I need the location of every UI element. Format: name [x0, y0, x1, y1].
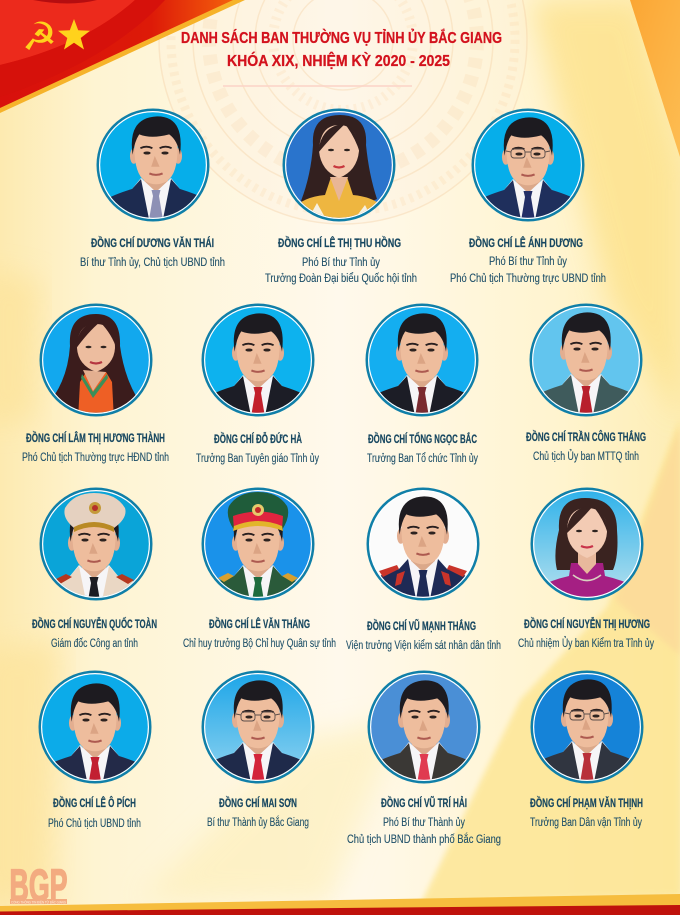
portrait	[202, 488, 314, 600]
role: Phó Bí thư Thành ủy	[383, 817, 465, 829]
name: ĐỒNG CHÍ ĐỖ ĐỨC HÀ	[214, 433, 302, 446]
role	[265, 257, 417, 285]
role: Trưởng Đoàn Đại biểu Quốc hội tỉnh	[265, 273, 417, 285]
card: Phạm Văn Thịnh	[529, 670, 645, 829]
role: Bí thư Tỉnh ủy, Chủ tịch UBND tỉnh	[80, 257, 225, 269]
card: Vũ Trí Hải	[347, 670, 501, 846]
portrait	[40, 488, 152, 600]
role: Trưởng Ban Tuyên giáo Tỉnh ủy	[196, 453, 319, 465]
portrait	[202, 670, 314, 784]
portrait	[365, 488, 481, 609]
card: Nguyễn Thị Hương	[518, 488, 654, 650]
icon: star	[58, 19, 90, 50]
card: Lê Ánh Dương	[450, 108, 606, 285]
card: Mai Sơn	[200, 670, 316, 829]
name: ĐỒNG CHÍ LÂM THỊ HƯƠNG THÀNH	[26, 432, 165, 445]
role: Chủ tịch Ủy ban MTTQ tỉnh	[533, 450, 639, 463]
portrait	[202, 304, 314, 416]
card: Lê Ô Pích	[37, 670, 153, 830]
logo watermark BGP: CỔNG THÔNG TIN ĐIỆN TỬ BẮC GIANG	[11, 899, 66, 904]
portrait	[96, 108, 214, 229]
role: Bí thư Thành ủy Bắc Giang	[207, 816, 309, 829]
portrait	[366, 304, 478, 416]
logo watermark BGP	[10, 860, 68, 911]
card: Dương Văn Thái	[80, 108, 225, 269]
title: DANH SÁCH BAN THƯỜNG VỤ TỈNH ỦY BẮC GIANG	[181, 28, 502, 47]
portrait	[40, 304, 152, 420]
card: Lê Thị Thu Hồng	[265, 108, 417, 285]
name: ĐỒNG CHÍ LÊ Ô PÍCH	[53, 797, 136, 810]
card: Lâm Thị Hương Thành	[22, 304, 169, 464]
portrait	[530, 488, 644, 604]
title: KHÓA XIX, NHIỆM KỲ 2020 - 2025	[227, 51, 450, 70]
bottom band	[0, 894, 680, 915]
name: ĐỒNG CHÍ TỐNG NGỌC BẮC	[368, 432, 477, 446]
role: Phó Bí thư Tỉnh ủy	[489, 256, 567, 268]
logo watermark BGP: BGP	[10, 860, 68, 911]
role	[450, 256, 606, 285]
role: Phó Chủ tịch Thường trực UBND tỉnh	[450, 273, 606, 285]
card: Trần Công Thắng	[526, 304, 646, 463]
portrait	[38, 670, 152, 784]
name: ĐỒNG CHÍ DƯƠNG VĂN THÁI	[91, 237, 214, 250]
role: Chỉ huy trưởng Bộ Chỉ huy Quân sự tỉnh	[183, 638, 336, 650]
name: ĐỒNG CHÍ LÊ VĂN THẮNG	[209, 618, 310, 631]
name: ĐỒNG CHÍ VŨ MẠNH THẮNG	[367, 620, 476, 633]
role: Phó Chủ tịch UBND tỉnh	[48, 818, 141, 830]
name: ĐỒNG CHÍ LÊ THỊ THU HỒNG	[278, 237, 401, 250]
role: Giám đốc Công an tỉnh	[51, 638, 138, 650]
role: Chủ tịch UBND thành phố Bắc Giang	[347, 833, 501, 846]
name: ĐỒNG CHÍ NGUYỄN QUỐC TOÀN	[32, 617, 157, 631]
portrait	[282, 108, 396, 225]
name: ĐỒNG CHÍ LÊ ÁNH DƯƠNG	[469, 237, 583, 250]
card: Tống Ngọc Bắc	[364, 304, 480, 465]
icon: hammer and sickle: ☭	[22, 15, 57, 60]
card: Nguyễn Quốc Toàn	[32, 488, 157, 650]
red flag corner	[0, 0, 245, 113]
name: ĐỒNG CHÍ VŨ TRÍ HẢI	[381, 797, 467, 810]
portrait	[528, 304, 644, 425]
card: Vũ Mạnh Thắng	[346, 488, 501, 652]
bronze drum watermark	[159, 0, 527, 224]
name: ĐỒNG CHÍ MAI SƠN	[219, 797, 297, 810]
top-right orange ribbon	[630, 0, 680, 157]
role: Phó Bí thư Tỉnh ủy	[302, 257, 380, 269]
title	[181, 28, 502, 70]
role: Trưởng Ban Dân vận Tỉnh ủy	[530, 817, 642, 829]
role: Trưởng Ban Tổ chức Tỉnh ủy	[367, 453, 478, 465]
portrait	[529, 670, 645, 792]
role: Phó Chủ tịch Thường trực HĐND tỉnh	[22, 452, 169, 464]
portrait	[470, 108, 586, 230]
role	[347, 817, 501, 846]
card: Lê Văn Thắng	[183, 488, 336, 650]
role: Viện trưởng Viện kiểm sát nhân dân tỉnh	[346, 640, 501, 652]
portrait	[368, 670, 480, 784]
card: Đỗ Đức Hà	[196, 304, 319, 465]
